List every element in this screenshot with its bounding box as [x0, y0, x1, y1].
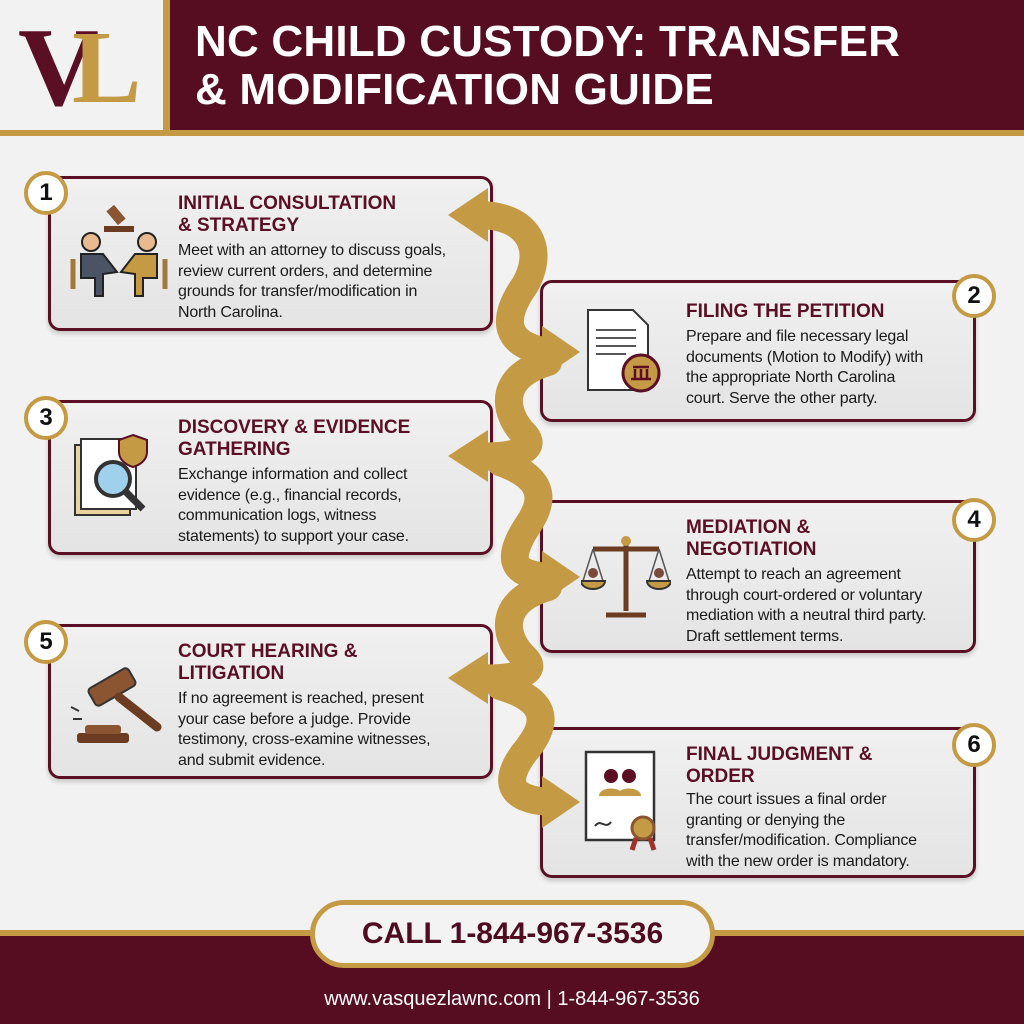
panel: step 4: Attempt to reach an agreement: [686, 566, 901, 583]
number 5: 5: [39, 628, 53, 655]
title: [170, 0, 1024, 130]
panel: step 6: The court issues a final order: [686, 791, 886, 808]
panel: step 5: and submit evidence.: [178, 752, 325, 768]
logo: [0, 0, 165, 132]
panel: step 2: documents (Motion to Modify) with: [686, 348, 923, 366]
icon: order certificate: [584, 750, 656, 851]
number 5: [24, 620, 68, 664]
icon: magnifier on documents: [74, 434, 148, 516]
title: & MODIFICATION GUIDE: [195, 65, 714, 114]
number 1: 1: [39, 179, 53, 206]
number 1: [24, 171, 68, 215]
number 2: 2: [967, 282, 981, 309]
text: step 2: FILING THE PETITION: [686, 301, 884, 322]
call button: CALL 1-844-967-3536: [362, 917, 663, 950]
text: step 1: INITIAL CONSULTATION: [178, 193, 396, 214]
title: NC CHILD CUSTODY: TRANSFER: [195, 17, 900, 66]
text: step 6: FINAL JUDGMENT &: [686, 744, 872, 765]
text: step 4: [686, 517, 817, 560]
text: step 1: [178, 193, 396, 236]
panel: step 5: If no agreement is reached, present: [178, 690, 424, 707]
header: [0, 0, 1024, 136]
text: step 6: ORDER: [686, 766, 755, 787]
panel: step 3: evidence (e.g., financial records,: [178, 486, 402, 504]
panel: step 6: with the new order is mandatory.: [686, 852, 910, 870]
number 3: 3: [39, 404, 53, 431]
text: step 5: COURT HEARING &: [178, 641, 357, 662]
panel: step 4: Draft settlement terms.: [686, 628, 843, 644]
number 6: [952, 723, 996, 767]
panel: step 5: [48, 624, 493, 779]
text: step 3: GATHERING: [178, 439, 291, 460]
panel: step 2: Prepare and file necessary legal: [686, 328, 908, 345]
number 4: [952, 498, 996, 542]
panel: step 2: [540, 280, 976, 422]
panel: step 6: [540, 727, 976, 878]
panel: step 1: Meet with an attorney to discuss goals,: [178, 242, 446, 259]
text: step 3: DISCOVERY & EVIDENCE: [178, 417, 410, 438]
panel: step 5: your case before a judge. Provide: [178, 710, 411, 728]
footer: [0, 930, 1024, 1024]
icon: scales: [581, 536, 671, 618]
panel: step 1: grounds for transfer/modification in: [178, 283, 417, 300]
panel: step 2: court. Serve the other party.: [686, 390, 877, 406]
call button: [310, 900, 715, 968]
logo: L: [72, 10, 141, 125]
text: step 4: MEDIATION &: [686, 517, 810, 538]
logo: V: [18, 6, 99, 130]
icon: petition document: [587, 309, 660, 392]
number 4: 4: [967, 506, 981, 533]
text: step 5: LITIGATION: [178, 663, 284, 684]
panel: step 3: Exchange information and collect: [178, 466, 407, 483]
panel: step 2: the appropriate North Carolina: [686, 369, 895, 386]
panel: step 5: testimony, cross-examine witnesses,: [178, 731, 430, 748]
text: step 6: [686, 744, 872, 787]
text: step 1: & STRATEGY: [178, 215, 299, 236]
panel: step 4: [540, 500, 976, 653]
panel: step 4: mediation with a neutral third party.: [686, 607, 926, 624]
panel: step 3: statements) to support your case.: [178, 528, 409, 544]
panel: step 3: [48, 400, 493, 555]
number 2: [952, 274, 996, 318]
website text: www.vasquezlawnc.com | 1-844-967-3536: [324, 988, 700, 1010]
panel: step 4: through court-ordered or voluntary: [686, 586, 922, 604]
text: step 5: [178, 641, 357, 684]
panel: step 6: granting or denying the: [686, 812, 845, 828]
text: step 4: NEGOTIATION: [686, 539, 817, 560]
panel: step 1: North Carolina.: [178, 304, 283, 320]
number 6: 6: [967, 731, 981, 758]
icon: meeting: [70, 204, 168, 297]
number 3: [24, 396, 68, 440]
panel: step 3: communication logs, witness: [178, 507, 376, 524]
panel: step 6: transfer/modification. Compliance: [686, 832, 917, 849]
icon: gavel: [70, 667, 162, 743]
text: step 3: [178, 417, 410, 460]
panel: step 1: [48, 176, 493, 331]
panel: step 1: review current orders, and determine: [178, 262, 432, 280]
